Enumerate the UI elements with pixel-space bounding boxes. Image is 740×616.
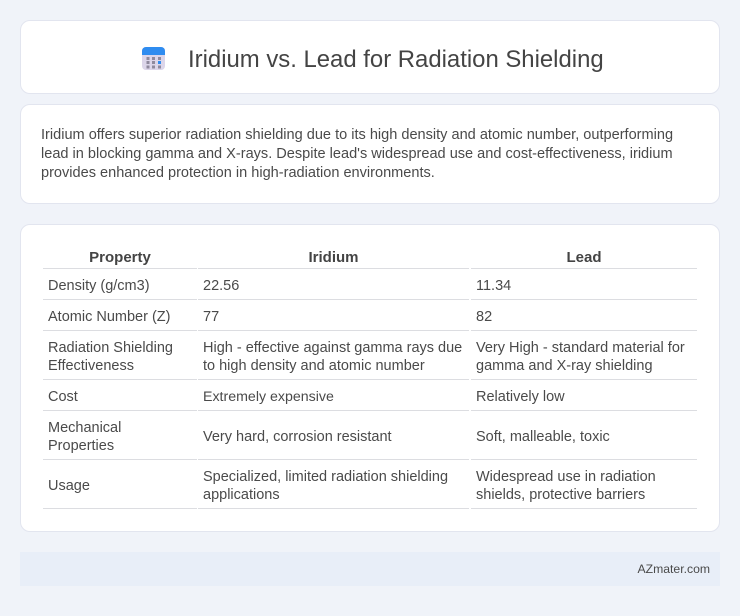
row: radiation shielding effectiveness: Very High - standard material for — [476, 340, 685, 356]
row: atomic number: 77 — [203, 309, 219, 325]
row: usage: Widespread use in radiation — [476, 469, 656, 485]
row: atomic number: 82 — [476, 309, 492, 325]
row: radiation shielding effectiveness: Effectiveness — [48, 358, 134, 374]
intro paragraph — [41, 127, 673, 181]
row: mechanical properties — [48, 420, 610, 454]
intro paragraph: lead in blocking gamma and X-rays. Despite lead's widespread use and cost-effectiveness, iridium — [41, 146, 673, 162]
icon: calendar — [142, 47, 165, 70]
row: radiation shielding effectiveness — [48, 340, 685, 374]
row: usage — [48, 469, 656, 503]
row: mechanical properties: Mechanical — [48, 420, 121, 436]
row: cost: Cost — [48, 389, 78, 405]
row: usage: Specialized, limited radiation shielding — [203, 469, 448, 485]
row: cost — [48, 389, 565, 405]
table header — [89, 249, 602, 266]
row: usage: Usage — [48, 478, 90, 494]
row: cost: Extremely expensive — [203, 389, 334, 405]
row: density: Density (g/cm3) — [48, 278, 150, 294]
row: cost: Relatively low — [476, 389, 565, 405]
panel: comparison table — [20, 224, 720, 532]
intro paragraph: provides enhanced protection in high-radiation environments. — [41, 165, 435, 181]
row: usage: shields, protective barriers — [476, 487, 645, 503]
row: atomic number — [48, 309, 492, 325]
row: radiation shielding effectiveness: to high density and atomic number — [203, 358, 425, 374]
row: atomic number: Atomic Number (Z) — [48, 309, 170, 325]
row: density — [48, 278, 511, 294]
row: density: 11.34 — [476, 278, 511, 294]
row: usage: applications — [203, 487, 280, 503]
panel: intro text — [20, 104, 720, 204]
row: mechanical properties: Very hard, corrosion resistant — [203, 429, 392, 445]
row: mechanical properties: Soft, malleable, toxic — [476, 429, 610, 445]
panel: footer — [20, 552, 720, 586]
table header: Property — [89, 249, 151, 266]
footer credit: AZmater.com — [638, 562, 710, 576]
table header: Iridium — [308, 249, 358, 266]
table header: Lead — [566, 249, 602, 266]
row: radiation shielding effectiveness: High - effective against gamma rays due — [203, 340, 462, 356]
row: mechanical properties: Properties — [48, 438, 114, 454]
intro paragraph: Iridium offers superior radiation shielding due to its high density and atomic number, outperforming — [41, 127, 673, 143]
title: Iridium vs. Lead for Radiation Shielding — [188, 46, 604, 73]
row: density: 22.56 — [203, 278, 239, 294]
row: radiation shielding effectiveness: gamma and X-ray shielding — [476, 358, 653, 374]
row: radiation shielding effectiveness: Radiation Shielding — [48, 340, 173, 356]
panel: title card — [20, 20, 720, 94]
